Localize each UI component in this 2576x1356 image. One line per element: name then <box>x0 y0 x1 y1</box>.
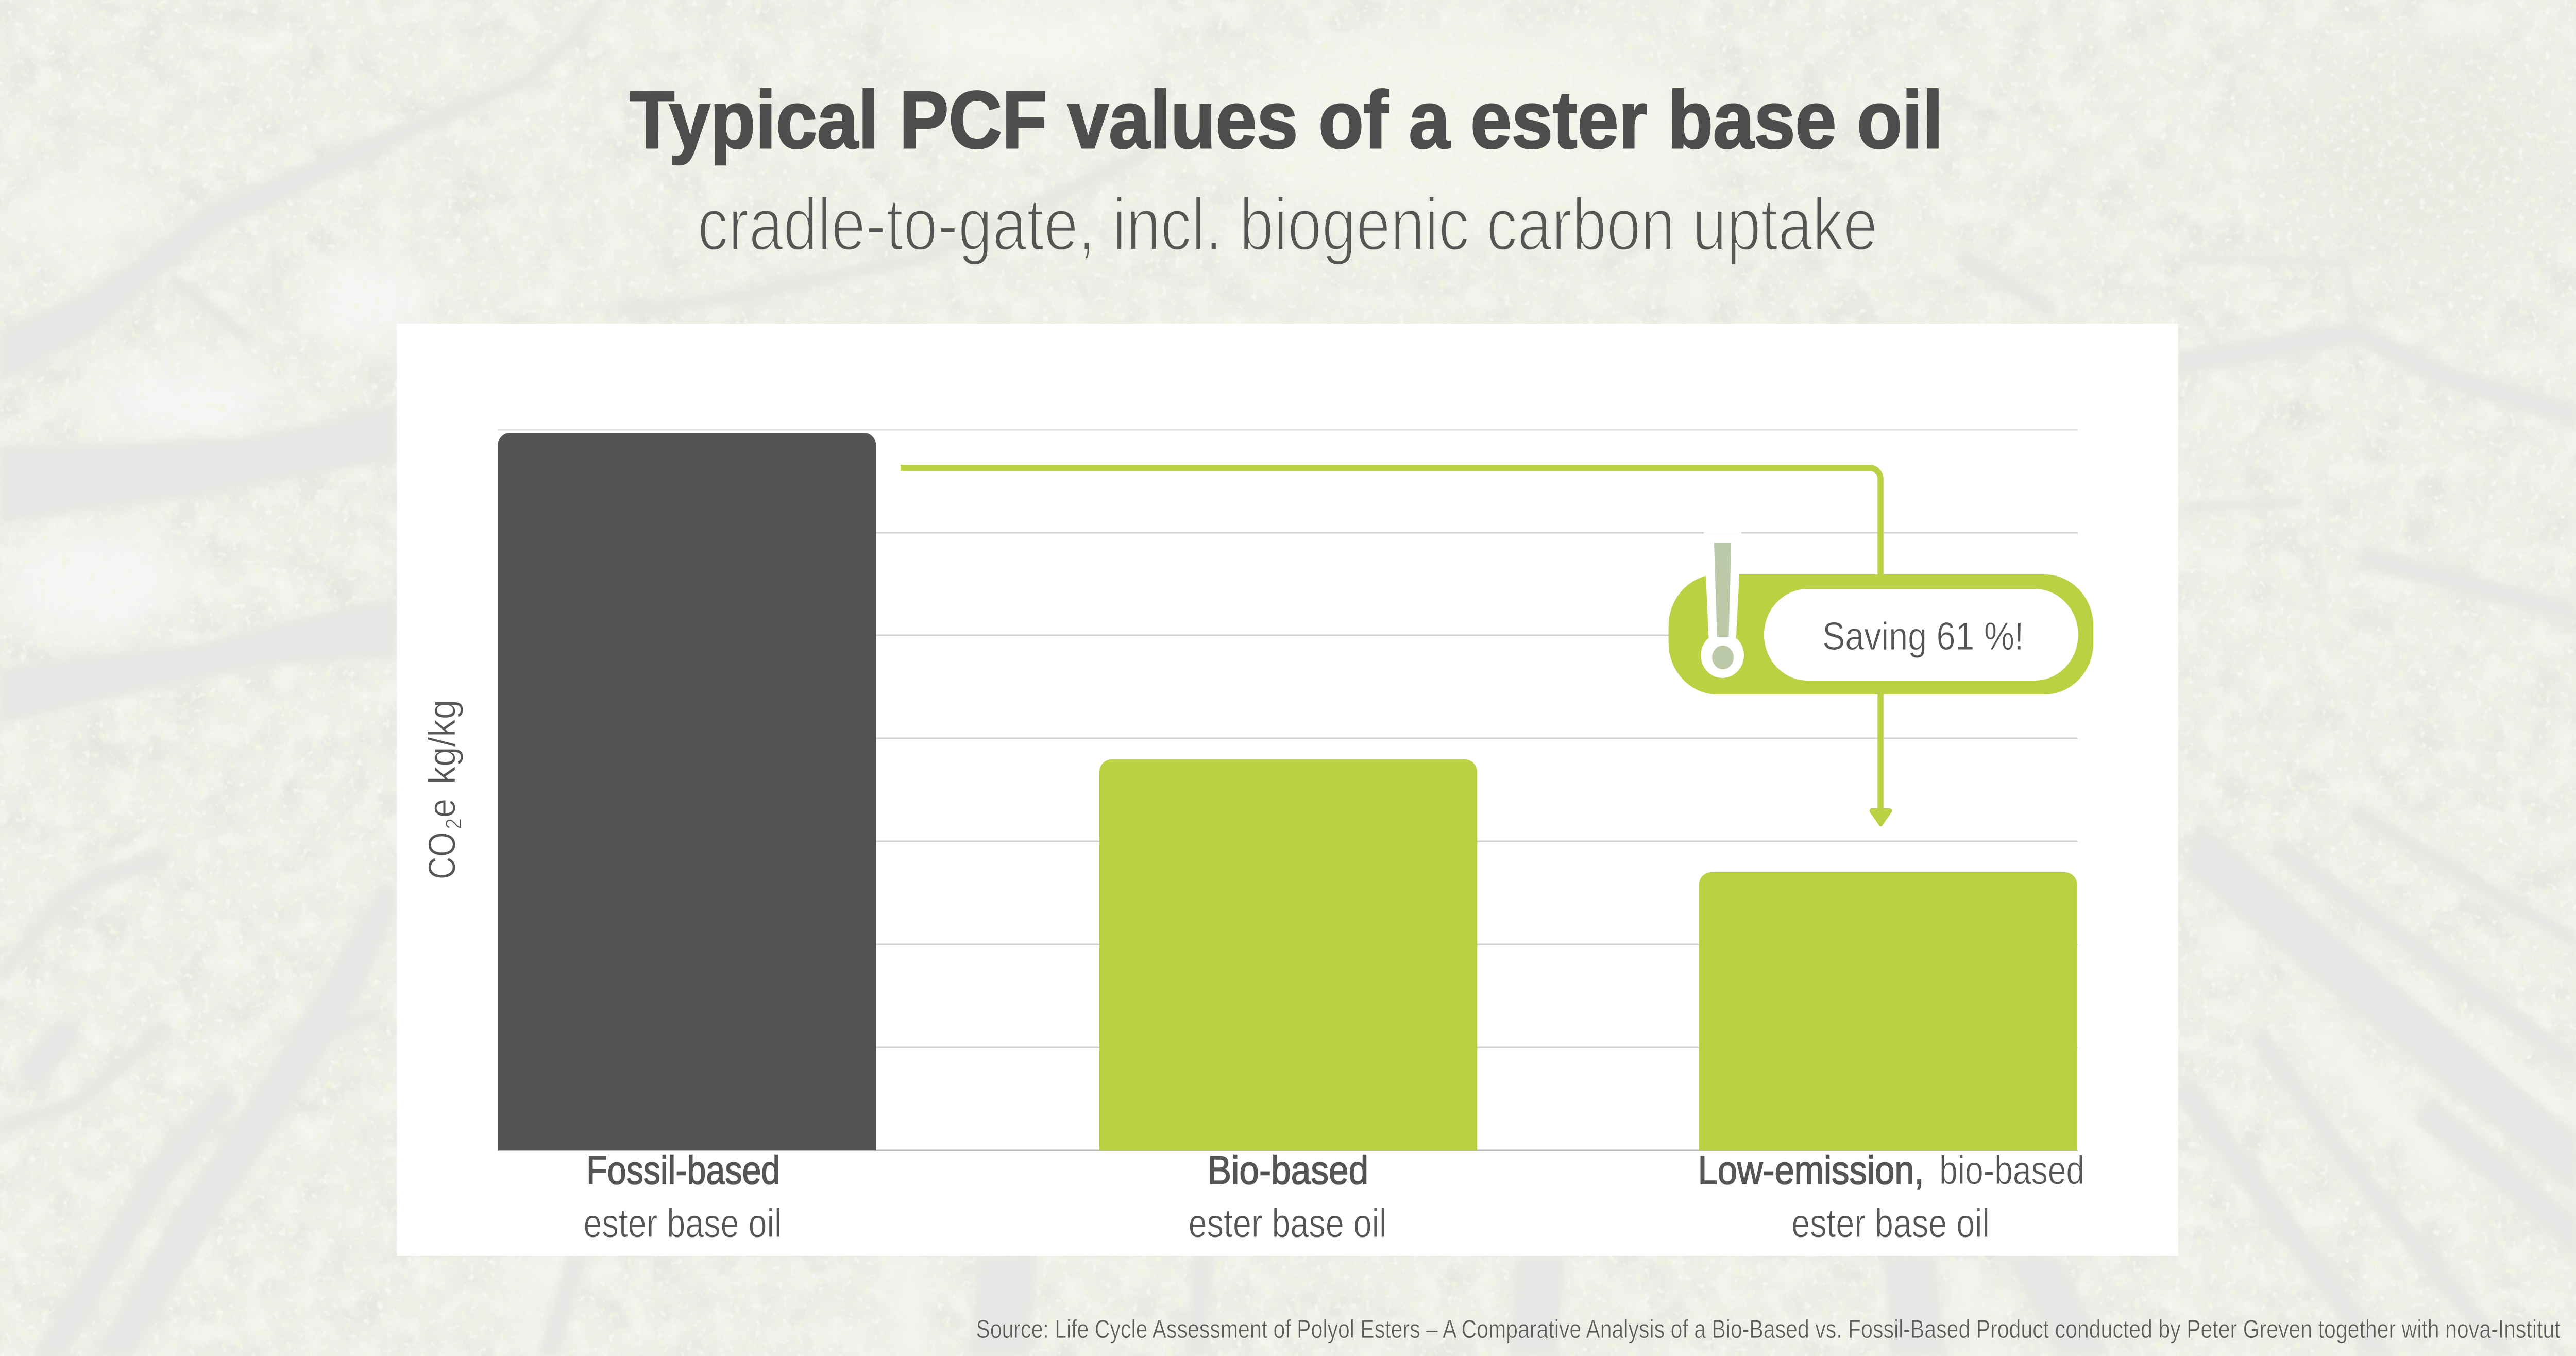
y-axis label: 2 <box>442 818 466 829</box>
category label: low-emission bio-based: bio-based <box>1939 1148 2084 1193</box>
category label: fossil-based: Fossil-based <box>586 1148 780 1193</box>
category label: low-emission bio-based <box>1698 1148 2084 1246</box>
callout: saving 61 % <box>1669 532 2093 694</box>
y-axis label <box>421 700 466 879</box>
category label: bio-based: Bio-based <box>1208 1148 1368 1193</box>
y-axis label: CO <box>421 832 464 879</box>
y-axis label: e <box>421 799 464 818</box>
category label: bio-based <box>1189 1148 1386 1246</box>
chart gridlines <box>498 430 2078 1150</box>
category label: fossil-based: ester base oil <box>583 1201 782 1246</box>
bar: fossil-based <box>498 433 876 1150</box>
category label: bio-based: ester base oil <box>1189 1201 1386 1246</box>
arrow: saving from fossil to low-emission <box>901 468 1892 826</box>
title: Typical PCF values of a ester base oil <box>630 74 1943 165</box>
category label: low-emission bio-based: ester base oil <box>1791 1201 1990 1246</box>
category label: low-emission bio-based: Low-emission, <box>1698 1148 1924 1193</box>
category label: fossil-based <box>583 1148 782 1246</box>
bar: bio-based <box>1099 759 1477 1150</box>
panel: chart card <box>397 324 2178 1256</box>
y-axis label: kg/kg <box>421 700 464 784</box>
bar: low-emission bio-based <box>1699 872 2077 1150</box>
icon: exclamation mark <box>1701 532 1744 678</box>
subtitle: cradle-to-gate, incl. biogenic carbon uptake <box>698 183 1877 266</box>
callout: saving 61 %: Saving 61 %! <box>1822 614 2024 658</box>
